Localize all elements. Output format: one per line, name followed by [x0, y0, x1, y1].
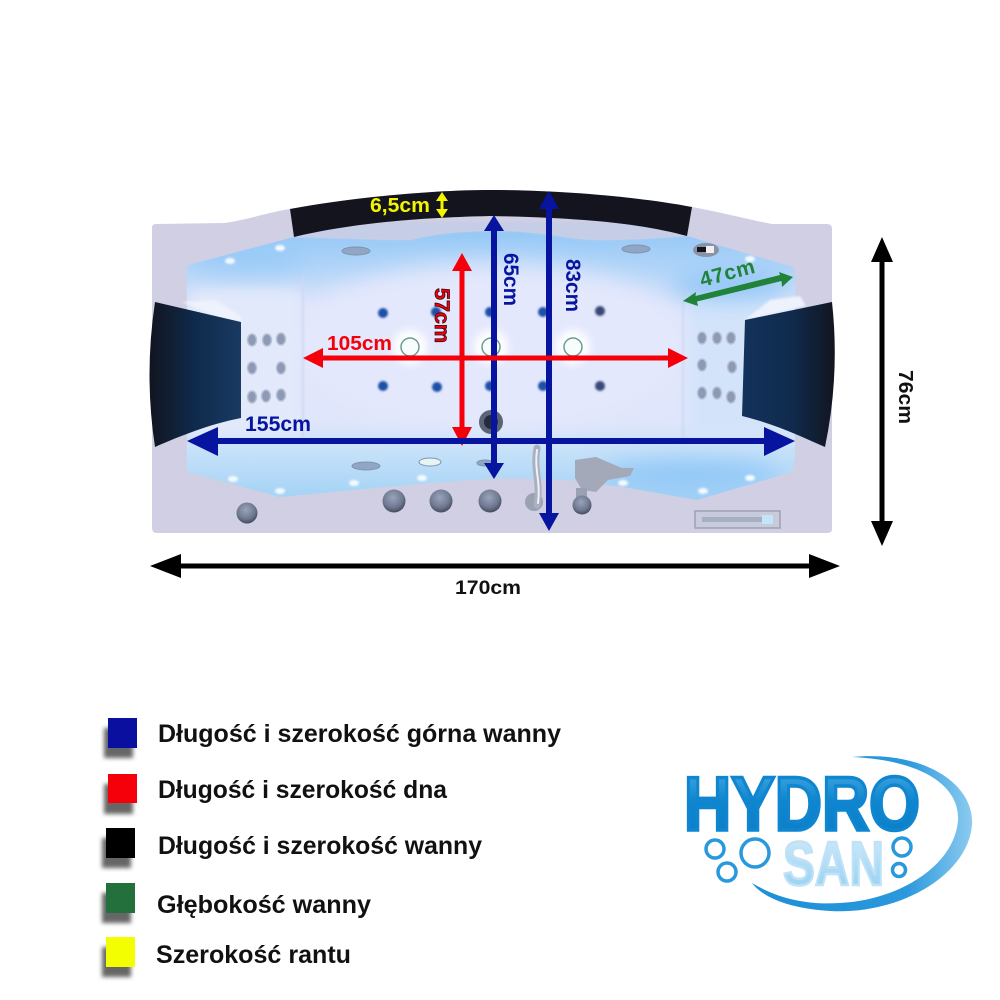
- pillow supports: [182, 296, 806, 326]
- legend item: yellow: [102, 937, 351, 977]
- icon: top right nozzle: [693, 243, 719, 257]
- icon: left massage jets: [248, 333, 286, 403]
- icon: control valves: [236, 490, 502, 524]
- icon: small rim LEDs: [225, 245, 755, 494]
- arrow: 170cm black horizontal: [150, 554, 840, 578]
- icon: floor jets: [378, 306, 605, 392]
- legend: [102, 718, 561, 977]
- left pillow: [150, 302, 241, 447]
- arrow: 65cm blue vertical: [484, 215, 504, 479]
- icon: underwater lights: [393, 330, 590, 364]
- icon: control panel: [695, 511, 780, 528]
- legend item: blue: Długość i szerokość górna wanny: [158, 720, 561, 748]
- logo: Hydro San: [684, 756, 972, 911]
- label: 170cm: 170cm: [455, 578, 521, 599]
- basin: [180, 225, 805, 505]
- icon: rim jets: [342, 245, 650, 470]
- legend item: black: Długość i szerokość wanny: [158, 832, 482, 860]
- arrow: 155cm blue horizontal: [187, 427, 795, 456]
- arrow: 57cm red vertical: [452, 253, 472, 446]
- legend item: green: Głębokość wanny: [157, 891, 371, 919]
- arrow: 6,5cm yellow: [436, 192, 448, 218]
- logo word SAN: SAN: [783, 830, 884, 899]
- arrow: 76cm black vertical: [871, 237, 893, 546]
- icon: drain: [479, 410, 503, 434]
- label: 76cm: 76cm: [894, 370, 916, 424]
- legend item: green: [102, 883, 371, 923]
- arrow: 83cm blue vertical: [539, 191, 559, 531]
- legend item: black: [102, 828, 482, 868]
- floor centre highlight: [325, 250, 656, 306]
- logo swoosh: [752, 756, 972, 911]
- label: 83cm: 83cm: [561, 259, 584, 312]
- legend item: yellow: Szerokość rantu: [156, 941, 351, 969]
- black rear rim: [290, 190, 692, 237]
- end wall highlights: [192, 290, 788, 435]
- wall crease: [303, 275, 683, 440]
- label: 57cm: 57cm: [430, 288, 453, 343]
- icon: faucet: [525, 448, 543, 511]
- rim front band: [294, 222, 688, 240]
- label: 105cm: 105cm: [327, 333, 392, 355]
- logo word HYDRO: HYDRO: [684, 762, 920, 847]
- right pillow: [742, 302, 835, 447]
- logo bubbles: [706, 838, 911, 881]
- label: 6,5cm: 6,5cm: [370, 195, 430, 217]
- arrow: 47cm green: [683, 272, 793, 306]
- legend item: blue: [104, 718, 561, 758]
- label: 155cm: 155cm: [245, 413, 311, 436]
- tub rim: [152, 190, 832, 533]
- icon: hand shower: [572, 457, 634, 514]
- legend item: red: [104, 774, 448, 814]
- label: 65cm: 65cm: [499, 253, 522, 306]
- panel: bathtub top view: [150, 190, 835, 533]
- blue glow patches: [195, 250, 790, 489]
- arrow: 105cm red horizontal: [303, 348, 688, 368]
- label: 47cm: 47cm: [697, 255, 757, 292]
- legend item: red: Długość i szerokość dna: [158, 776, 448, 804]
- icon: right massage jets: [698, 332, 736, 403]
